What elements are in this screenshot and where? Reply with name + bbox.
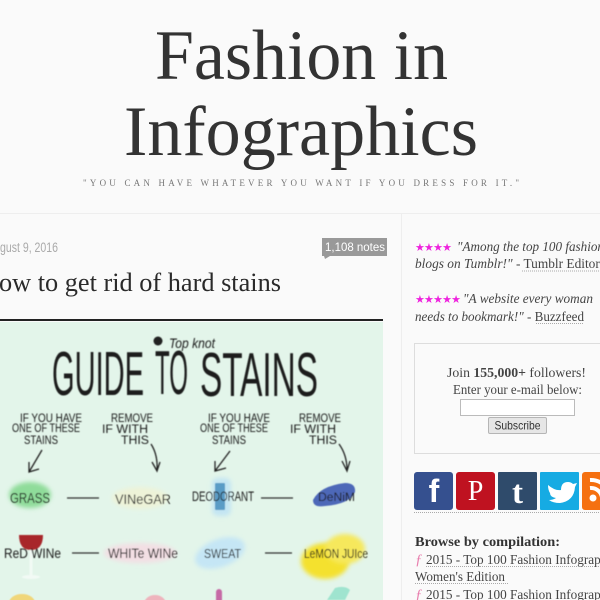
instruction: remove column 4: THIS xyxy=(309,435,337,447)
instruction: remove column 4 xyxy=(290,413,350,471)
title: Infographics xyxy=(124,93,478,171)
title xyxy=(124,17,478,171)
subscribe button: Subscribe xyxy=(494,418,541,432)
instruction: stains column 1: ONE OF THESE xyxy=(12,423,80,435)
instruction: stains column 3: STAINS xyxy=(212,435,246,447)
tagline: "YOU CAN HAVE WHATEVER YOU WANT IF YOU DRESS FOR IT." xyxy=(83,178,519,188)
guide heading: TO xyxy=(155,339,188,408)
icon: facebook xyxy=(414,472,453,510)
instruction: stains column 3: ONE OF THESE xyxy=(200,423,268,435)
testimonial: buzzfeed: needs to bookmark!" - Buzzfeed xyxy=(415,310,584,325)
list item 1 xyxy=(415,552,600,585)
row 2: red wine white wine: WHITe WINe xyxy=(108,546,178,561)
icon: tumblr xyxy=(498,472,537,511)
header: blog title and tagline xyxy=(83,17,519,188)
instruction: remove column 2 xyxy=(102,413,160,471)
instruction: stains column 3 xyxy=(200,413,270,471)
post heading: ow to get rid of hard stains xyxy=(0,268,281,297)
brand: top knot: Top knot xyxy=(169,335,216,351)
row 1: grass vinegar: GRASS xyxy=(10,490,50,507)
instruction: stains column 1: STAINS xyxy=(24,435,58,447)
notes badge: 1,108 notes xyxy=(325,240,385,254)
row 1: grass vinegar: VINeGAR xyxy=(115,491,171,507)
browse by compilation list xyxy=(415,535,600,600)
testimonial: buzzfeed: ★★★★★ xyxy=(415,294,461,306)
instruction: remove column 4: REMOVE xyxy=(299,413,341,425)
row 3: partial stain blobs xyxy=(9,587,350,600)
row 1: deodorant denim: DEODORANT xyxy=(192,489,254,504)
list item 1: ƒ xyxy=(415,552,422,568)
row 1: deodorant denim: DeNiM xyxy=(318,492,355,504)
instruction: stains column 1: IF YOU HAVE xyxy=(20,413,82,425)
guide heading xyxy=(52,350,318,398)
row 2: sweat lemon juice: LeMON JUIce xyxy=(304,547,368,561)
icon: tumblr: t xyxy=(512,475,523,511)
brand: top knot xyxy=(154,335,216,351)
row 2: sweat lemon juice: SWEAT xyxy=(204,546,241,561)
post date: gust 9, 2016 xyxy=(0,240,58,255)
subscribe text: Enter your e-mail below: xyxy=(453,383,582,398)
icon: pinterest xyxy=(456,472,495,510)
row 1: deodorant denim xyxy=(192,478,355,516)
guide heading: STAINS xyxy=(200,341,318,410)
subscribe box xyxy=(414,344,600,454)
notes badge xyxy=(322,238,387,259)
icon: twitter xyxy=(540,472,579,510)
row 2: sweat lemon juice xyxy=(191,531,368,579)
list item 1: Women's Edition xyxy=(415,570,505,585)
guide heading: GUIDE xyxy=(52,340,144,409)
testimonial: buzzfeed xyxy=(415,292,593,325)
sidebar testimonials xyxy=(415,240,600,325)
icon: pinterest: P xyxy=(468,476,483,507)
email input xyxy=(460,400,574,416)
column instructions with arrows xyxy=(12,413,350,472)
subscribe text: Join 155,000+ followers! xyxy=(447,366,586,381)
title: Fashion in xyxy=(155,17,448,95)
testimonial: buzzfeed: "A website every woman xyxy=(463,292,593,307)
row 2: red wine white wine: ReD WINe xyxy=(4,546,61,561)
icon: facebook: f xyxy=(429,473,440,509)
testimonial: tumblr: ★★★★ xyxy=(415,242,452,254)
row 1: grass vinegar xyxy=(9,482,171,509)
list heading: Browse by compilation: xyxy=(415,535,560,550)
infographic image: guide to stains xyxy=(0,322,383,600)
instruction: remove column 2: THIS xyxy=(121,435,149,447)
social icons row xyxy=(414,472,600,512)
instruction: remove column 2: IF WITH xyxy=(102,424,148,436)
row 2: red wine white wine xyxy=(4,535,178,579)
subscribe text xyxy=(447,366,586,398)
testimonial: tumblr xyxy=(415,240,600,272)
instruction: stains column 3: IF YOU HAVE xyxy=(208,413,270,425)
instruction: remove column 4: IF WITH xyxy=(290,424,336,436)
icon: rss xyxy=(582,472,600,510)
instruction: remove column 2: REMOVE xyxy=(111,413,153,425)
instruction: stains column 1 xyxy=(12,413,82,472)
